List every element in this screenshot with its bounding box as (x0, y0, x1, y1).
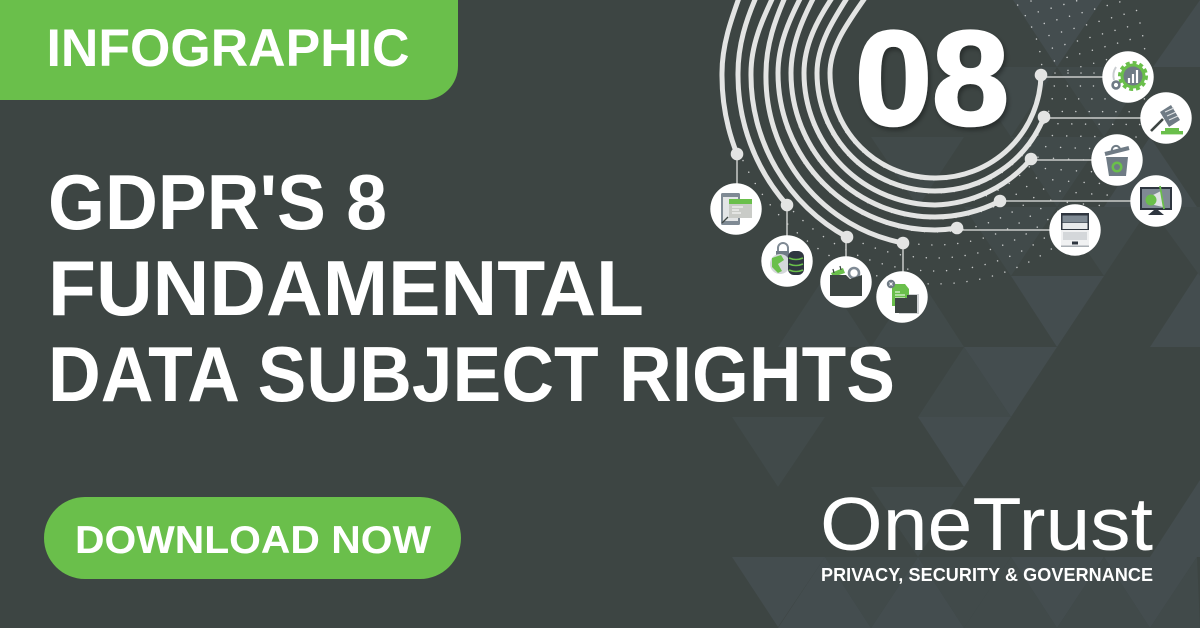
title: DATA SUBJECT RIGHTS (48, 330, 895, 418)
icon: laptop (1049, 204, 1101, 256)
number 08: 08 (855, 4, 1009, 154)
title: GDPR'S 8 (48, 158, 387, 246)
button: download now (44, 497, 461, 579)
icon: gavel (1140, 92, 1192, 144)
badge: infographic (0, 0, 458, 100)
logo tagline: PRIVACY, SECURITY & GOVERNANCE (821, 565, 1153, 585)
icon: trash bin (1091, 134, 1143, 186)
spiral arcs (722, 0, 1044, 243)
connector lines (737, 77, 1143, 275)
arc end nodes (731, 69, 1050, 249)
icon: globe, lock and database (761, 235, 813, 287)
button label: DOWNLOAD NOW (75, 519, 431, 562)
triangle pattern (732, 0, 1200, 628)
icon: document and folder (876, 271, 928, 323)
badge label: INFOGRAPHIC (46, 19, 410, 78)
icon: analytics gear (1102, 51, 1154, 103)
icon: code window (710, 183, 762, 235)
icon: monitor megaphone (1130, 175, 1182, 227)
title: FUNDAMENTAL (48, 244, 644, 332)
logo: OneTrust: OneTrust (820, 482, 1153, 566)
title (48, 158, 895, 418)
icon: folder with calendar (820, 256, 872, 308)
concentric dot rings (724, 0, 1146, 284)
